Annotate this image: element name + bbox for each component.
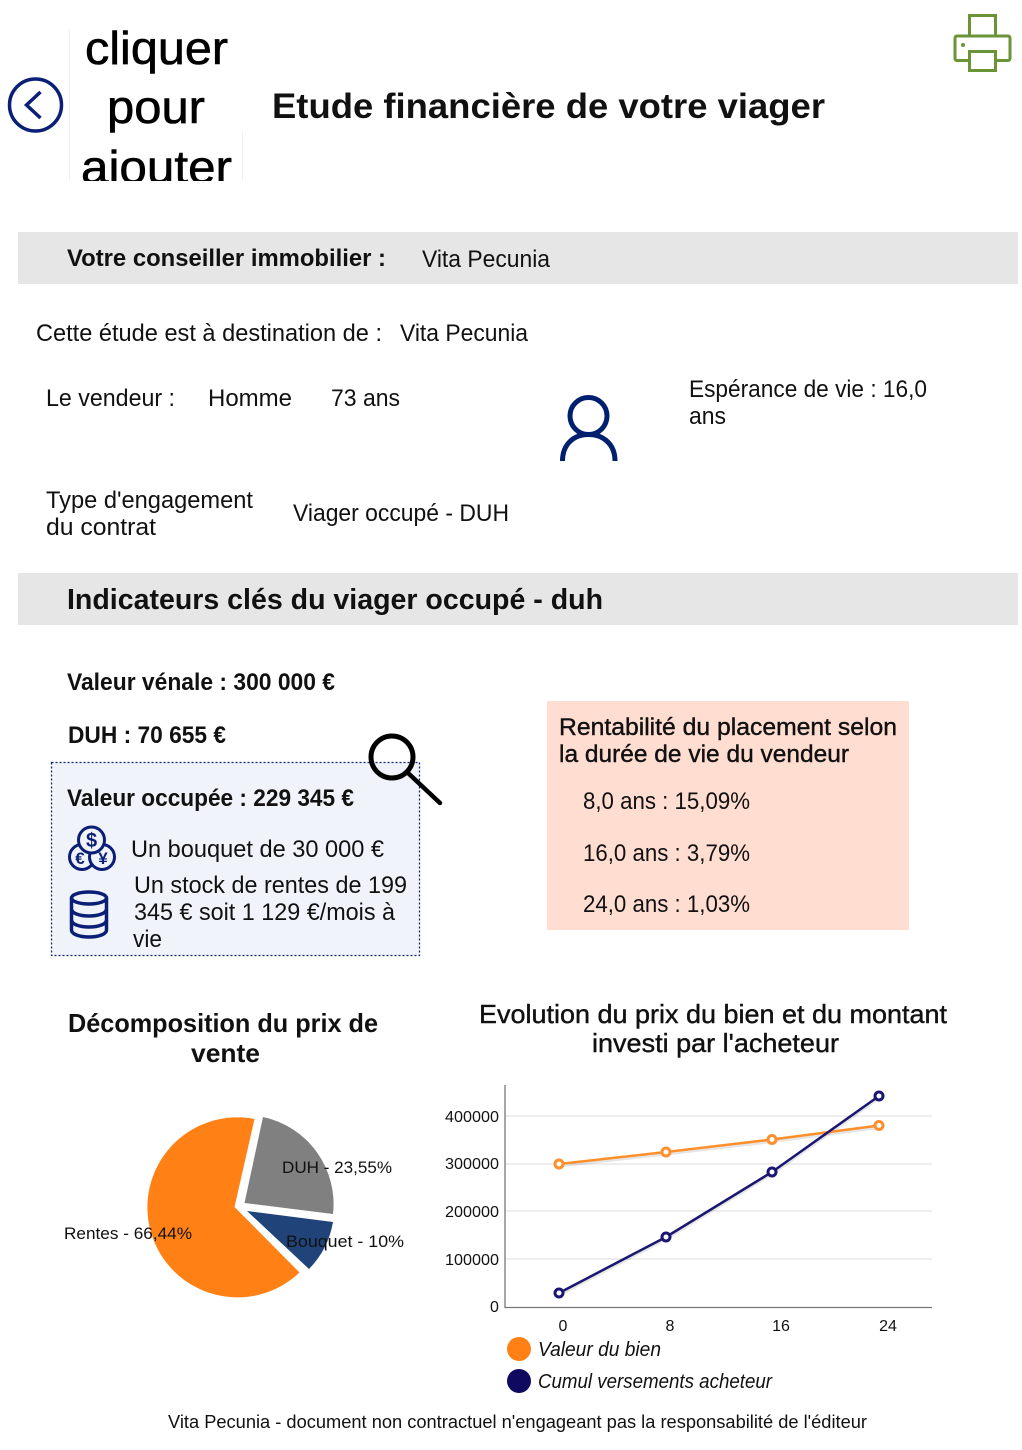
- text: esperance de vie: ans: [689, 403, 726, 430]
- panel: indicateurs heading: [18, 573, 1018, 625]
- legend: [507, 1337, 773, 1393]
- icon: coins: $: [86, 830, 97, 852]
- text: rentes: Un stock de rentes de 199: [134, 872, 407, 899]
- icon: coins: [70, 827, 114, 870]
- text: destination: Vita Pecunia: [400, 320, 529, 347]
- panel: conseiller heading: [18, 232, 1018, 284]
- text: vendeur: [46, 385, 400, 412]
- logo placeholder: ajouter: [81, 141, 232, 193]
- line chart: 24: [879, 1318, 897, 1335]
- pie chart: Bouquet - 10%: [286, 1232, 404, 1251]
- icon: coins: €: [75, 849, 85, 868]
- panel: rentabilite: 8,0 ans : 15,09%: [583, 788, 750, 815]
- line chart: 0: [490, 1299, 499, 1316]
- icon: person: [562, 398, 615, 461]
- line chart: 8: [666, 1318, 675, 1335]
- icon: coins: ¥: [98, 849, 108, 868]
- heading: pie chart: Décomposition du prix de: [68, 1008, 378, 1038]
- legend: Valeur du bien: [538, 1339, 661, 1361]
- icon: back arrow: [10, 79, 62, 131]
- pie chart: DUH - 23,55%: [282, 1158, 392, 1177]
- panel: rentabilite: [547, 701, 909, 930]
- text: rentes: vie: [133, 926, 162, 953]
- series: cumul versements: [555, 1092, 883, 1297]
- text: esperance de vie: Espérance de vie : 16,0: [689, 376, 927, 403]
- logo placeholder: pour: [107, 81, 205, 133]
- text: destination: Cette étude est à destination de :: [36, 320, 382, 347]
- text: vendeur: 73 ans: [331, 385, 400, 412]
- text: bouquet: Un bouquet de 30 000 €: [131, 836, 385, 863]
- heading: pie chart: vente: [191, 1038, 260, 1068]
- icon: database stack: [72, 892, 106, 937]
- line chart: 200000: [445, 1204, 499, 1221]
- panel: rentabilite: Rentabilité du placement selon: [559, 714, 897, 741]
- text: type d'engagement: [46, 487, 509, 541]
- panel: valeur occupee: Valeur occupée : 229 345 €: [67, 785, 354, 812]
- line chart: 16: [772, 1318, 790, 1335]
- pie chart: Rentes - 66,44%: [64, 1224, 192, 1243]
- text: duh: DUH : 70 655 €: [68, 722, 226, 749]
- icon: magnifier: [371, 736, 440, 803]
- text: type d'engagement: Type d'engagement: [46, 487, 253, 514]
- heading: line chart: Evolution du prix du bien et du montant: [479, 999, 948, 1029]
- logo placeholder: cliquer: [85, 22, 228, 74]
- text: rentes: [133, 872, 407, 953]
- line chart: 300000: [445, 1156, 499, 1173]
- panel: conseiller heading: Votre conseiller immobilier :: [67, 245, 386, 272]
- footer: Vita Pecunia - document non contractuel n'engageant pas la responsabilité de l'éditeur: [168, 1412, 867, 1432]
- heading: line chart: investi par l'acheteur: [592, 1028, 839, 1058]
- line chart: [445, 1085, 932, 1335]
- line chart: 0: [559, 1318, 568, 1335]
- line chart: 400000: [445, 1109, 499, 1126]
- text: type d'engagement: Viager occupé - DUH: [293, 500, 509, 527]
- panel: rentabilite: la durée de vie du vendeur: [559, 741, 849, 768]
- text: valeur venale: Valeur vénale : 300 000 €: [67, 669, 335, 696]
- logo placeholder: [69, 30, 243, 181]
- text: vendeur: Homme: [208, 385, 292, 412]
- heading: line chart: [479, 999, 948, 1058]
- legend: Cumul versements acheteur: [538, 1371, 773, 1393]
- panel: rentabilite: 24,0 ans : 1,03%: [583, 891, 750, 918]
- panel: conseiller heading: Vita Pecunia: [422, 246, 551, 273]
- panel: indicateurs heading: Indicateurs clés du viager occupé - duh: [67, 584, 603, 616]
- pie chart: [64, 1117, 404, 1297]
- text: esperance de vie: [689, 376, 927, 430]
- text: rentes: 345 € soit 1 129 €/mois à: [134, 899, 396, 926]
- line shadows: [559, 1098, 879, 1295]
- panel: valeur occupee: [52, 762, 420, 956]
- series: valeur du bien: [555, 1122, 883, 1168]
- text: vendeur: Le vendeur :: [46, 385, 175, 412]
- text: type d'engagement: du contrat: [46, 514, 156, 541]
- icon: printer: [955, 16, 1010, 70]
- heading: pie chart: [68, 1008, 378, 1068]
- panel: rentabilite: 16,0 ans : 3,79%: [583, 840, 750, 867]
- line chart: 100000: [445, 1252, 499, 1269]
- title: Etude financière de votre viager: [272, 87, 825, 126]
